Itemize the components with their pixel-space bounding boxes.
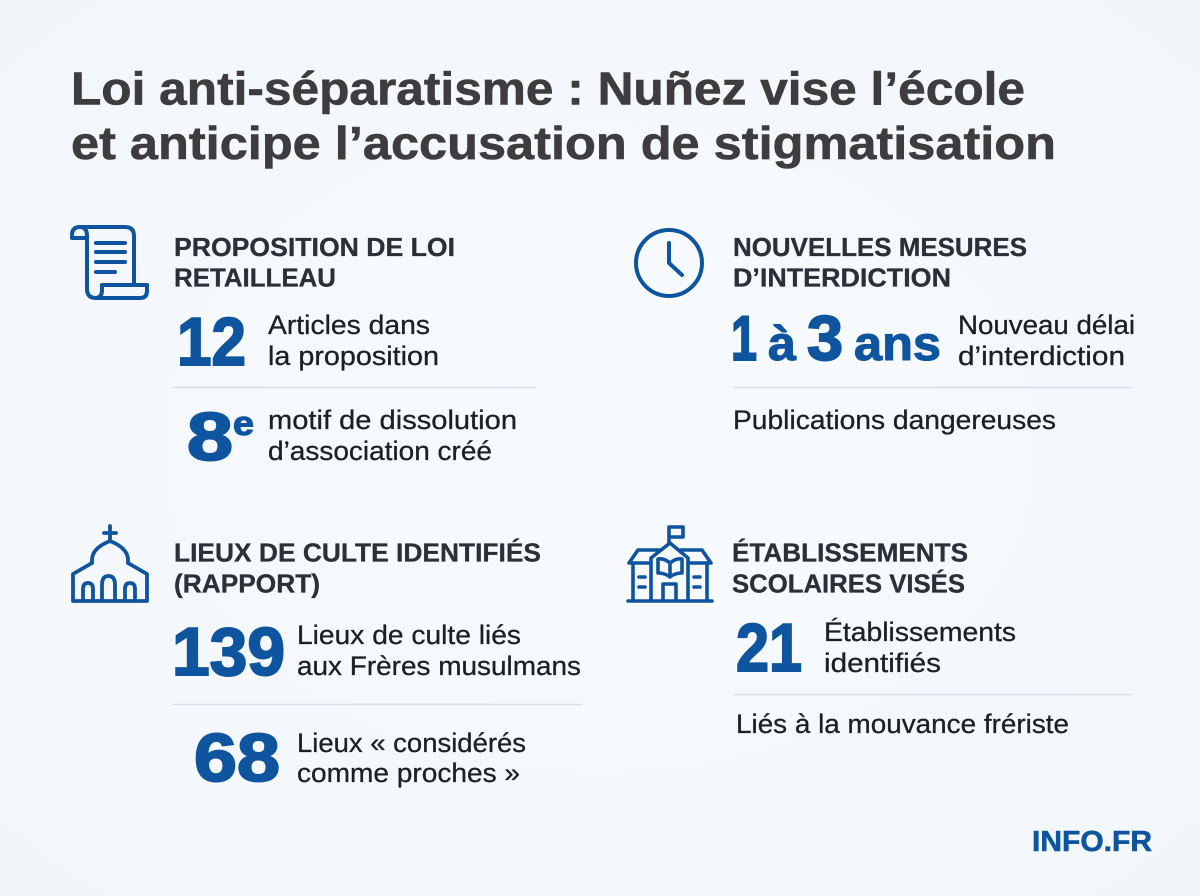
heading: NOUVELLES MESURES xyxy=(733,232,1027,262)
stat: 139 lieux: 139 xyxy=(172,614,285,690)
stat: 12 articles: la proposition xyxy=(268,341,439,371)
stat: 139 lieux: Lieux de culte liés xyxy=(297,620,521,650)
stat: 1 à 3 ans: à xyxy=(768,318,796,371)
stat: 8e motif: motif de dissolution xyxy=(268,405,517,435)
heading: SCOLAIRES VISÉS xyxy=(732,568,965,598)
heading: RETAILLEAU xyxy=(174,262,336,292)
heading: D’INTERDICTION xyxy=(733,262,951,292)
heading xyxy=(174,538,541,598)
stat: 21 établissements xyxy=(736,610,1016,686)
title: Loi anti-séparatisme : Nuñez vise l’école xyxy=(71,62,1025,114)
stat: 139 lieux: aux Frères musulmans xyxy=(297,651,581,681)
heading xyxy=(733,232,1027,292)
stat: 1 à 3 ans xyxy=(731,304,1135,374)
panel: établissements scolaires xyxy=(628,527,1132,739)
stat: 21 établissements: Établissements xyxy=(824,617,1016,647)
stat: 139 lieux xyxy=(172,614,581,690)
stat: 8e motif: d’association créé xyxy=(268,436,492,466)
stat: 8e motif: e xyxy=(233,405,254,443)
heading xyxy=(174,232,455,292)
stat: 1 à 3 ans: ans xyxy=(854,318,941,371)
icon: clock xyxy=(636,230,702,296)
logo: INFO.FR: INFO.FR xyxy=(1032,826,1152,858)
text: publications dangereuses: Publications dangereuses xyxy=(733,405,1056,435)
stat: 21 établissements: identifiés xyxy=(824,648,941,678)
panel: nouvelles mesures xyxy=(636,230,1135,435)
icon: church xyxy=(73,526,147,601)
stat: 8e motif xyxy=(187,399,517,475)
heading: ÉTABLISSEMENTS xyxy=(732,538,968,568)
stat: 68 lieux: 68 xyxy=(194,720,280,796)
text: liés à la mouvance frériste: Liés à la mouvance frériste xyxy=(736,709,1069,739)
panel: lieux de culte xyxy=(73,526,582,796)
heading: (RAPPORT) xyxy=(174,568,320,598)
heading xyxy=(732,538,968,598)
panel: proposition de loi xyxy=(72,227,536,475)
stat: 68 lieux: comme proches » xyxy=(297,758,520,788)
stat: 12 articles xyxy=(177,304,439,380)
stat: 8e motif: 8 xyxy=(187,399,233,475)
title: et anticipe l’accusation de stigmatisation xyxy=(71,117,1056,169)
stat: 68 lieux xyxy=(194,720,526,796)
icon: scroll xyxy=(72,227,147,298)
heading: PROPOSITION DE LOI xyxy=(174,232,455,262)
stat: 12 articles: Articles dans xyxy=(268,310,430,340)
heading: LIEUX DE CULTE IDENTIFIÉS xyxy=(174,538,541,568)
stat: 1 à 3 ans: Nouveau délai xyxy=(958,310,1135,340)
stat: 1 à 3 ans: d’interdiction xyxy=(958,341,1125,371)
stat: 68 lieux: Lieux « considérés xyxy=(297,728,526,758)
icon: school xyxy=(628,527,712,601)
stat: 21 établissements: 21 xyxy=(736,610,802,686)
title xyxy=(71,62,1056,169)
stat: 1 à 3 ans: 3 xyxy=(807,304,843,374)
stat: 1 à 3 ans: 1 xyxy=(731,304,757,374)
stat: 12 articles: 12 xyxy=(177,304,246,380)
